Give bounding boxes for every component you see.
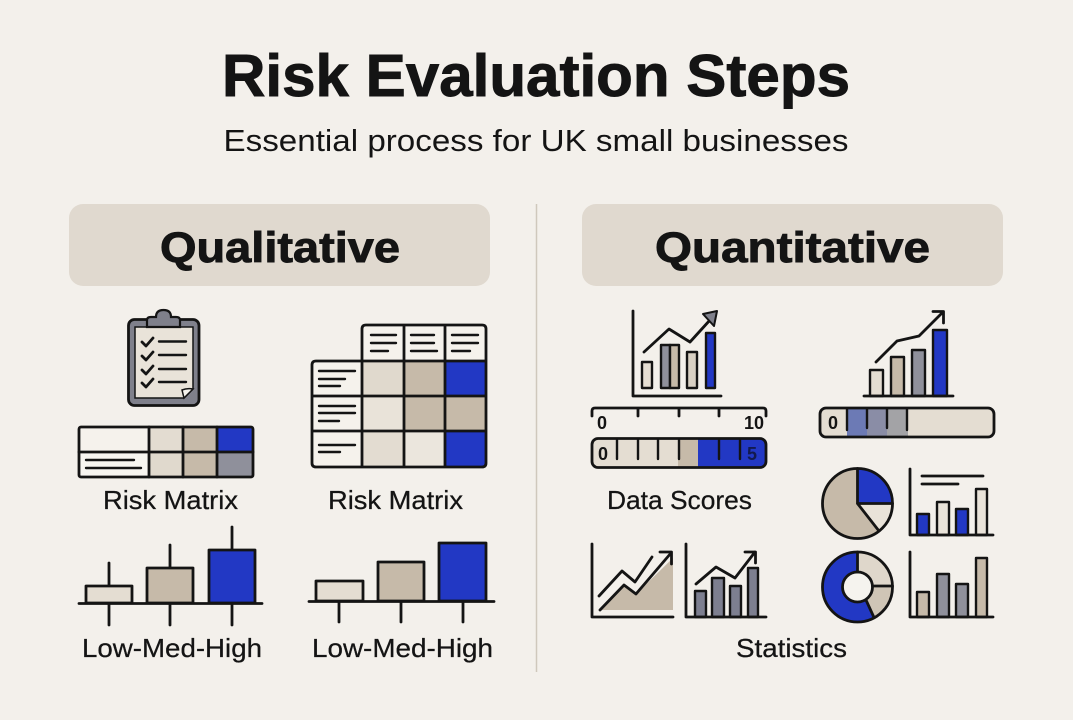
progress slider [820, 408, 994, 437]
subtitle: Essential process for UK small businesses [224, 123, 848, 158]
area trend chart [592, 544, 673, 617]
pie chart [822, 468, 892, 538]
donut chart [822, 552, 893, 622]
progress slider: 0 [828, 413, 838, 433]
heading: qualitative: Qualitative [160, 224, 400, 272]
score slider 0 to 5 [592, 438, 766, 468]
label: data scores: Data Scores [607, 485, 752, 515]
ruler scale 0 to 10: 10 [744, 413, 764, 433]
rising bar chart [864, 312, 953, 396]
score slider 0 to 5: 5 [747, 444, 757, 464]
label: risk matrix: Risk Matrix [103, 485, 238, 515]
heading: quantitative [582, 204, 1003, 286]
score slider 0 to 5: 0 [598, 444, 608, 464]
heading: quantitative: Quantitative [655, 224, 930, 272]
panel: quantitative [582, 204, 1003, 663]
ruler scale 0 to 10 [592, 408, 766, 433]
ruler scale 0 to 10: 0 [597, 413, 607, 433]
bar and arrow chart [686, 544, 766, 617]
heading: qualitative [69, 204, 490, 286]
label: statistics: Statistics [736, 633, 847, 663]
risk matrix large [312, 325, 486, 467]
label: risk matrix 2: Risk Matrix [328, 485, 463, 515]
title: Risk Evaluation Steps [222, 43, 850, 109]
label: low-med-high left: Low-Med-High [82, 633, 262, 663]
bar chart with legend lines [910, 469, 993, 535]
label: low-med-high right: Low-Med-High [312, 633, 493, 663]
bar and trend chart [633, 311, 721, 396]
low-med-high chart right [309, 543, 494, 622]
icon: clipboard checklist [128, 310, 199, 406]
risk matrix small [79, 427, 253, 477]
panel: qualitative [69, 204, 494, 663]
bar chart grey and tan [910, 552, 993, 617]
low-med-high chart left [79, 527, 262, 625]
